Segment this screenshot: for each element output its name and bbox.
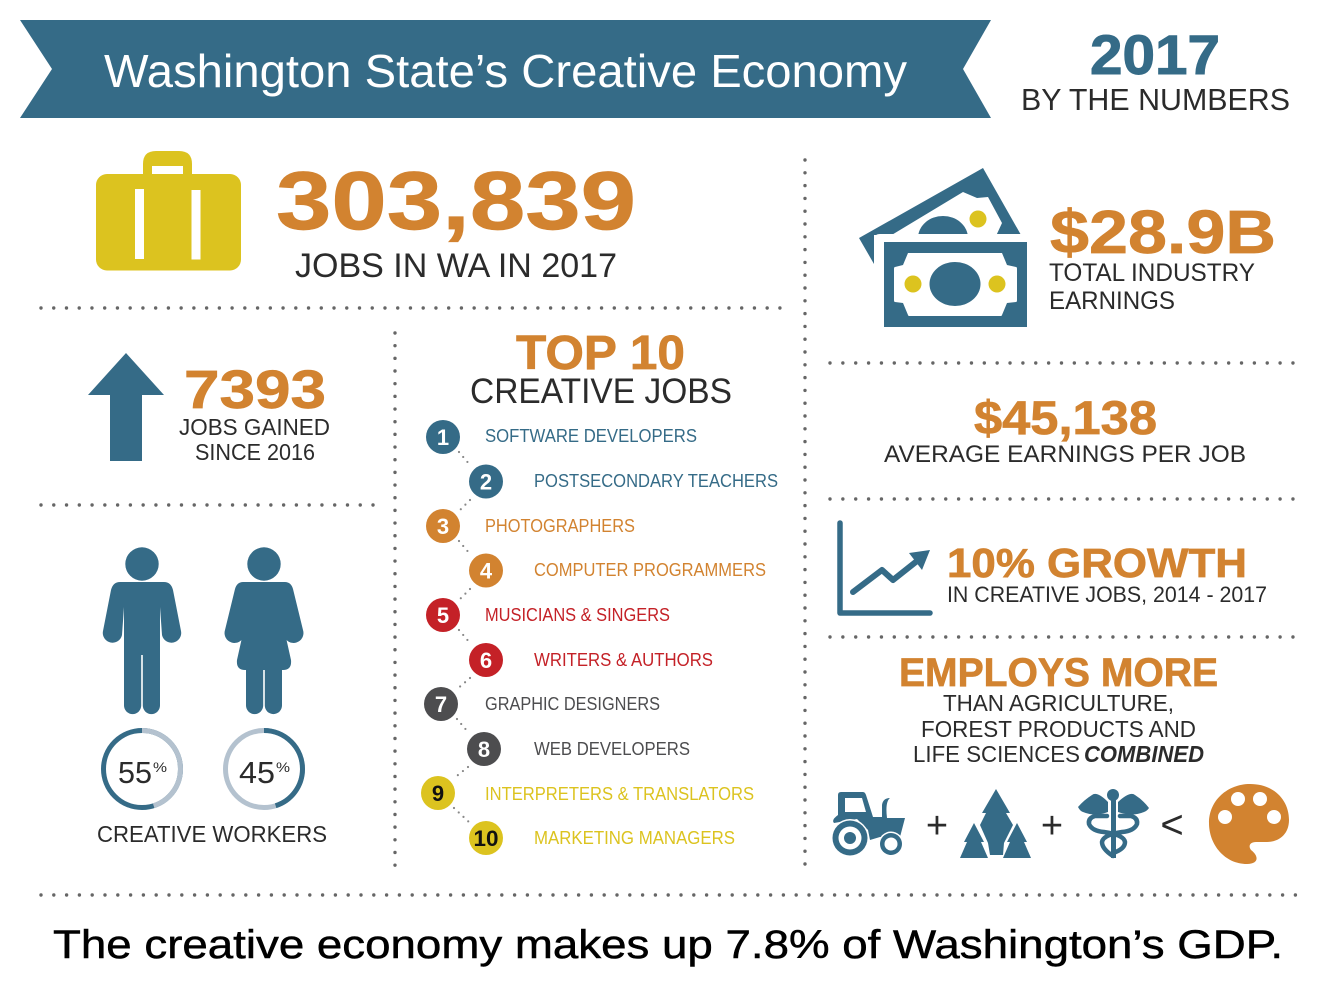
heading: employs more: EMPLOYS MORE — [899, 651, 1218, 695]
stat: $45,138: $45,138 — [974, 391, 1157, 444]
icon: caduceus — [1078, 789, 1149, 858]
symbol: less than: < — [1160, 803, 1184, 847]
list item 1 — [426, 420, 697, 454]
label: total industry earnings — [1049, 259, 1255, 315]
chart: 45% ring: % — [276, 759, 290, 775]
label: total industry earnings: TOTAL INDUSTRY — [1049, 259, 1255, 287]
label: jobs gained since 2016 — [179, 414, 330, 465]
text block: than agriculture: COMBINED — [1084, 741, 1204, 767]
text block: than agriculture: FOREST PRODUCTS AND — [921, 716, 1196, 742]
list item 2 — [469, 464, 778, 498]
chart: 45% ring — [226, 730, 302, 808]
icon: tractor — [831, 792, 905, 857]
icon: pine trees — [960, 789, 1031, 858]
heading: 2017 by the numbers: 2017 — [1090, 23, 1220, 86]
list item 10: MARKETING MANAGERS — [534, 828, 735, 848]
footer statement: The creative economy makes up 7.8% of Washington’s GDP. — [53, 923, 1283, 967]
stat: 303,839: 303,839 — [276, 154, 636, 247]
list item 3: PHOTOGRAPHERS — [485, 516, 635, 536]
title banner — [20, 20, 991, 118]
panel: jobs gained — [88, 353, 330, 465]
symbol: plus: + — [1041, 805, 1063, 847]
stat: 10% growth: 10% GROWTH — [947, 540, 1247, 586]
icon: growth chart — [840, 523, 930, 613]
heading: 2017 by the numbers: BY THE NUMBERS — [1021, 82, 1290, 117]
list item 1: 1 — [437, 425, 449, 450]
panel: creative workers gender split — [97, 547, 327, 847]
panel: top 10 creative jobs — [421, 327, 778, 855]
list item 2: 2 — [480, 470, 492, 494]
panel: jobs in WA — [96, 151, 636, 285]
subheading: creative jobs: CREATIVE JOBS — [470, 372, 732, 411]
list item 2: POSTSECONDARY TEACHERS — [534, 471, 778, 491]
chart: 55% ring: % — [153, 759, 167, 775]
list item 9 — [421, 776, 754, 810]
panel: 10% growth — [840, 523, 1267, 613]
icon: suitcase — [96, 151, 241, 270]
list item 10 — [469, 821, 735, 855]
list item 9: INTERPRETERS & TRANSLATORS — [485, 784, 754, 804]
panel: employs more — [831, 651, 1289, 864]
list item 6: 6 — [480, 648, 492, 673]
list item 6 — [469, 643, 713, 677]
title banner: Washington State’s Creative Economy — [104, 45, 907, 97]
label: average earnings per job: AVERAGE EARNINGS PER JOB — [884, 441, 1246, 468]
list item 5 — [426, 598, 670, 632]
chart: 45% ring: 45 — [239, 755, 275, 790]
list item 7: 7 — [435, 692, 447, 717]
panel: average earnings — [884, 391, 1246, 468]
list item 8: WEB DEVELOPERS — [534, 739, 690, 759]
text block: than agriculture: LIFE SCIENCES — [913, 741, 1080, 767]
icon: paint palette — [1209, 784, 1289, 864]
label: in creative jobs: IN CREATIVE JOBS, 2014 - 2017 — [947, 582, 1267, 607]
list item 4: COMPUTER PROGRAMMERS — [534, 560, 766, 580]
label: jobs in WA in 2017: JOBS IN WA IN 2017 — [295, 247, 617, 285]
icon: man — [103, 547, 181, 714]
stat: 7393: 7393 — [184, 360, 326, 420]
chart: 55% ring: 55 — [118, 755, 152, 790]
text block: than agriculture — [913, 690, 1204, 767]
label: jobs gained since 2016: SINCE 2016 — [195, 439, 315, 465]
list item 3 — [426, 509, 635, 543]
list item 3: 3 — [437, 514, 449, 539]
list item 6: WRITERS & AUTHORS — [534, 650, 713, 670]
heading: 2017 by the numbers — [1021, 23, 1290, 117]
label: total industry earnings: EARNINGS — [1049, 287, 1175, 315]
icon: money bills — [859, 168, 1027, 327]
icon: woman — [225, 547, 303, 714]
label: jobs gained since 2016: JOBS GAINED — [179, 414, 330, 440]
text block: than agriculture: THAN AGRICULTURE, — [943, 690, 1174, 716]
icon: up arrow — [88, 353, 164, 461]
list item 5: MUSICIANS & SINGERS — [485, 605, 670, 625]
list item 1: SOFTWARE DEVELOPERS — [485, 426, 697, 446]
chart: 55% ring — [104, 730, 180, 808]
panel: total industry earnings — [859, 168, 1276, 327]
list item 7: GRAPHIC DESIGNERS — [485, 694, 660, 714]
heading: top 10: TOP 10 — [516, 327, 685, 380]
stat: $28.9B: $28.9B — [1050, 198, 1276, 266]
list item 7 — [424, 687, 660, 721]
list item 8 — [467, 732, 690, 766]
symbol: plus: + — [926, 805, 948, 847]
list item 5: 5 — [437, 603, 449, 628]
list item 8: 8 — [478, 737, 490, 762]
list item 4 — [469, 554, 766, 588]
list item 10: 10 — [474, 826, 498, 851]
label: creative workers: CREATIVE WORKERS — [97, 821, 327, 847]
list item 4: 4 — [480, 558, 493, 584]
list item 9: 9 — [432, 781, 444, 806]
